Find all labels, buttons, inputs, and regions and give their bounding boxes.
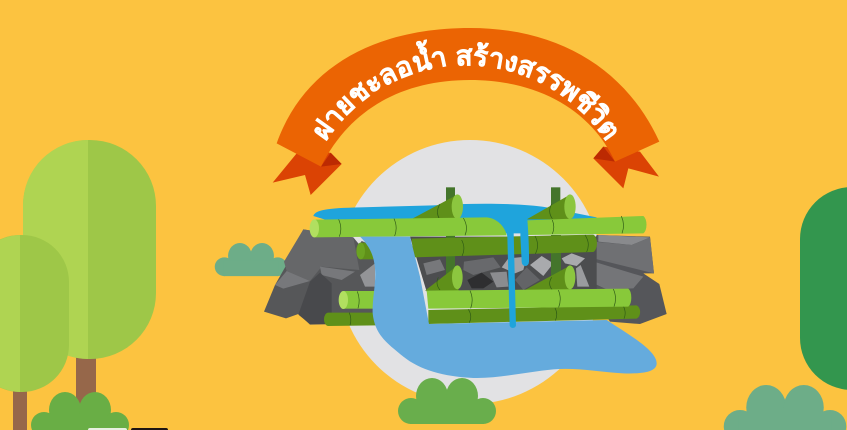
water: top stream: [313, 204, 597, 233]
bamboo: lower dark row right: [428, 305, 640, 324]
water: river: [360, 237, 657, 378]
bush: bottom left: [31, 392, 129, 430]
bush: left small: [215, 243, 287, 276]
rocks: left: [264, 229, 375, 325]
ribbon tail: left: [273, 153, 342, 195]
bamboo: top row right: [527, 216, 646, 235]
video control: black: [131, 428, 168, 430]
bamboo: left stub: [356, 243, 377, 259]
video control: white: [88, 428, 127, 430]
backdrop circle: [338, 140, 602, 404]
bamboo stakes: [446, 187, 561, 278]
bamboo: angled lower right: [525, 265, 575, 290]
bamboo: angled lower left: [425, 265, 463, 291]
ribbon banner: [273, 28, 659, 195]
tree: small left: [0, 235, 69, 430]
tree: right: [800, 187, 847, 390]
check dam illustration: [264, 187, 667, 378]
title: ฝายชะลอน้ำ สร้างสรรพชีวิต: [314, 39, 617, 142]
ribbon tail: right: [593, 147, 659, 188]
bamboo: angled upper right: [527, 194, 576, 219]
ribbon arc: [277, 28, 659, 167]
bamboo: lower dark row left: [324, 313, 377, 326]
bamboo: dark second row: [412, 235, 597, 257]
bamboo: top row left: [310, 217, 507, 237]
water: falling streams: [487, 210, 529, 328]
bamboo: lower light row right: [427, 289, 631, 309]
bamboo: angled upper left: [411, 194, 463, 219]
tree: large left: [23, 140, 156, 415]
bamboo: lower light row left: [339, 291, 375, 309]
rocks: right: [588, 235, 667, 324]
bush: bottom centre: [398, 378, 496, 424]
rocks: centre: [410, 237, 597, 292]
bush: bottom right: [724, 385, 846, 430]
